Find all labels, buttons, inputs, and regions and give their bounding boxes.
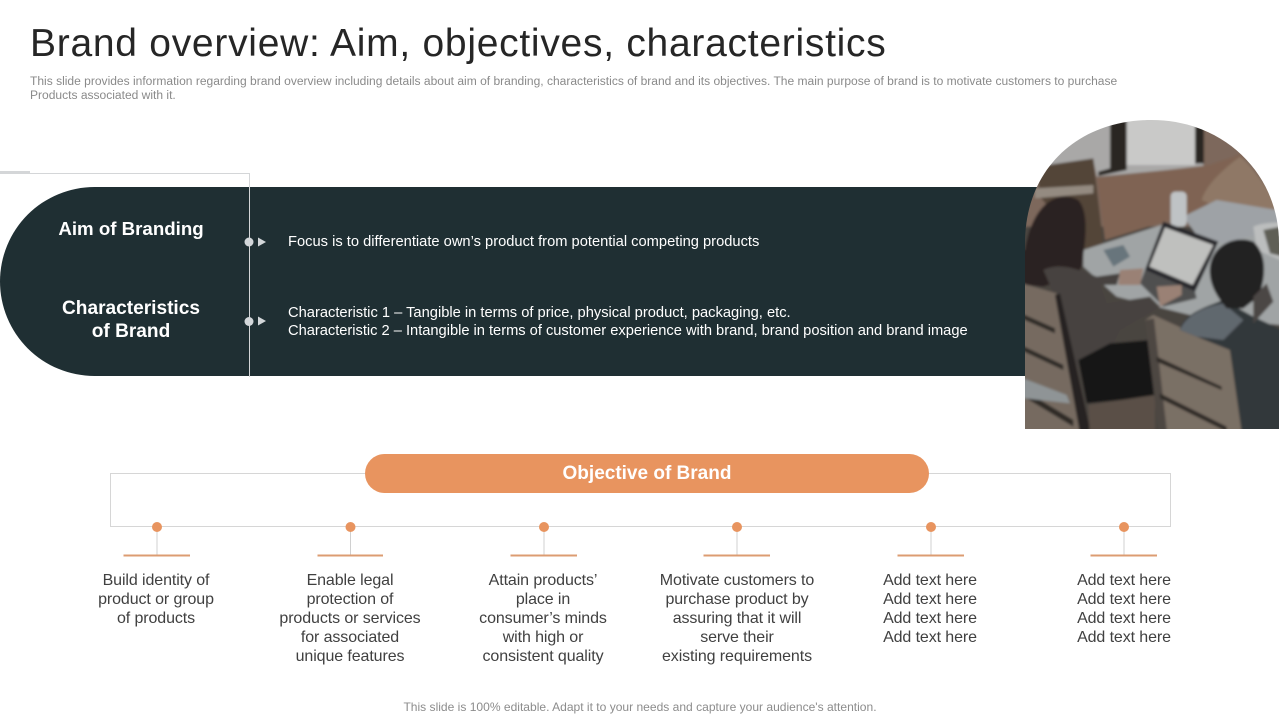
objective 5 text [883, 572, 977, 646]
objective 2 text: products or services [279, 610, 421, 627]
heading: characteristics of brand: Characteristics [62, 298, 200, 319]
subtitle description: This slide provides information regarding brand overview including details about aim of branding, characteristics of brand and its objectives. The main purpose of brand is to motivate customers to purchase [30, 74, 1117, 88]
objective frame line [110, 473, 1171, 527]
subtitle description [30, 74, 1117, 102]
objective 2 text: Enable legal [307, 572, 393, 589]
marker: characteristics row [244, 316, 266, 326]
objective 3 text: place in [516, 591, 570, 608]
text: characteristics detail: Characteristic 1 – Tangible in terms of price, physical product, packaging, etc. [288, 305, 791, 321]
objective 1 text: product or group [98, 591, 214, 608]
objective 4 text: purchase product by [665, 591, 809, 608]
objective 1 text: Build identity of [103, 572, 209, 589]
objective 6 text: Add text here [1077, 610, 1171, 627]
objective 3 marker [510, 522, 577, 556]
objective 2 text [279, 572, 421, 665]
objective 6 text: Add text here [1077, 572, 1171, 589]
objective 6 text [1077, 572, 1171, 646]
objective 3 text: Attain products’ [489, 572, 597, 589]
objective 2 text: protection of [307, 591, 393, 608]
objective 1 text [98, 572, 214, 627]
objective 1 marker [124, 522, 190, 556]
objective 5 marker [898, 522, 964, 556]
marker: aim row [244, 238, 266, 246]
objective 2 text: unique features [296, 648, 404, 665]
objective 4 text: Motivate customers to [660, 572, 814, 589]
objective 4 marker [704, 522, 770, 556]
objective 4 text: existing requirements [662, 648, 812, 665]
objective 2 marker [318, 522, 383, 556]
text: aim detail: Focus is to differentiate own’s product from potential competing products [288, 234, 759, 250]
connector frame line [0, 171, 250, 377]
objective 5 text: Add text here [883, 572, 977, 589]
objective 5 text: Add text here [883, 629, 977, 646]
objective 3 text: with high or [503, 629, 583, 646]
photo: team working at laptops [1025, 120, 1279, 429]
objective 6 text: Add text here [1077, 591, 1171, 608]
heading: aim of branding: Aim of Branding [58, 218, 204, 239]
subtitle description: Products associated with it. [30, 88, 176, 102]
objective 1 text: of products [117, 610, 195, 627]
heading: objective of brand pill: Objective of Brand [563, 463, 731, 484]
text: characteristics detail: Characteristic 2 – Intangible in terms of customer experience with brand, brand position and brand image [288, 323, 968, 339]
heading: characteristics of brand: of Brand [92, 321, 170, 342]
text: characteristics detail [288, 305, 968, 339]
objective 6 marker [1090, 522, 1157, 556]
objective 2 text: for associated [301, 629, 399, 646]
objective 3 text: consistent quality [483, 648, 603, 665]
objective 4 text: serve their [700, 629, 774, 646]
heading: objective of brand pill [365, 454, 929, 493]
title: Brand overview: Aim, objectives, characteristics [30, 22, 887, 65]
objective 4 text [660, 572, 814, 665]
objective 5 text: Add text here [883, 610, 977, 627]
objective 6 text: Add text here [1077, 629, 1171, 646]
panel: aim and characteristics band [0, 187, 1060, 376]
objective 3 text: consumer’s minds [479, 610, 607, 627]
objective 3 text [479, 572, 607, 665]
heading: characteristics of brand [62, 298, 200, 342]
objective 4 text: assuring that it will [673, 610, 801, 627]
objective 5 text: Add text here [883, 591, 977, 608]
footer note: This slide is 100% editable. Adapt it to your needs and capture your audience's attention. [403, 700, 877, 714]
